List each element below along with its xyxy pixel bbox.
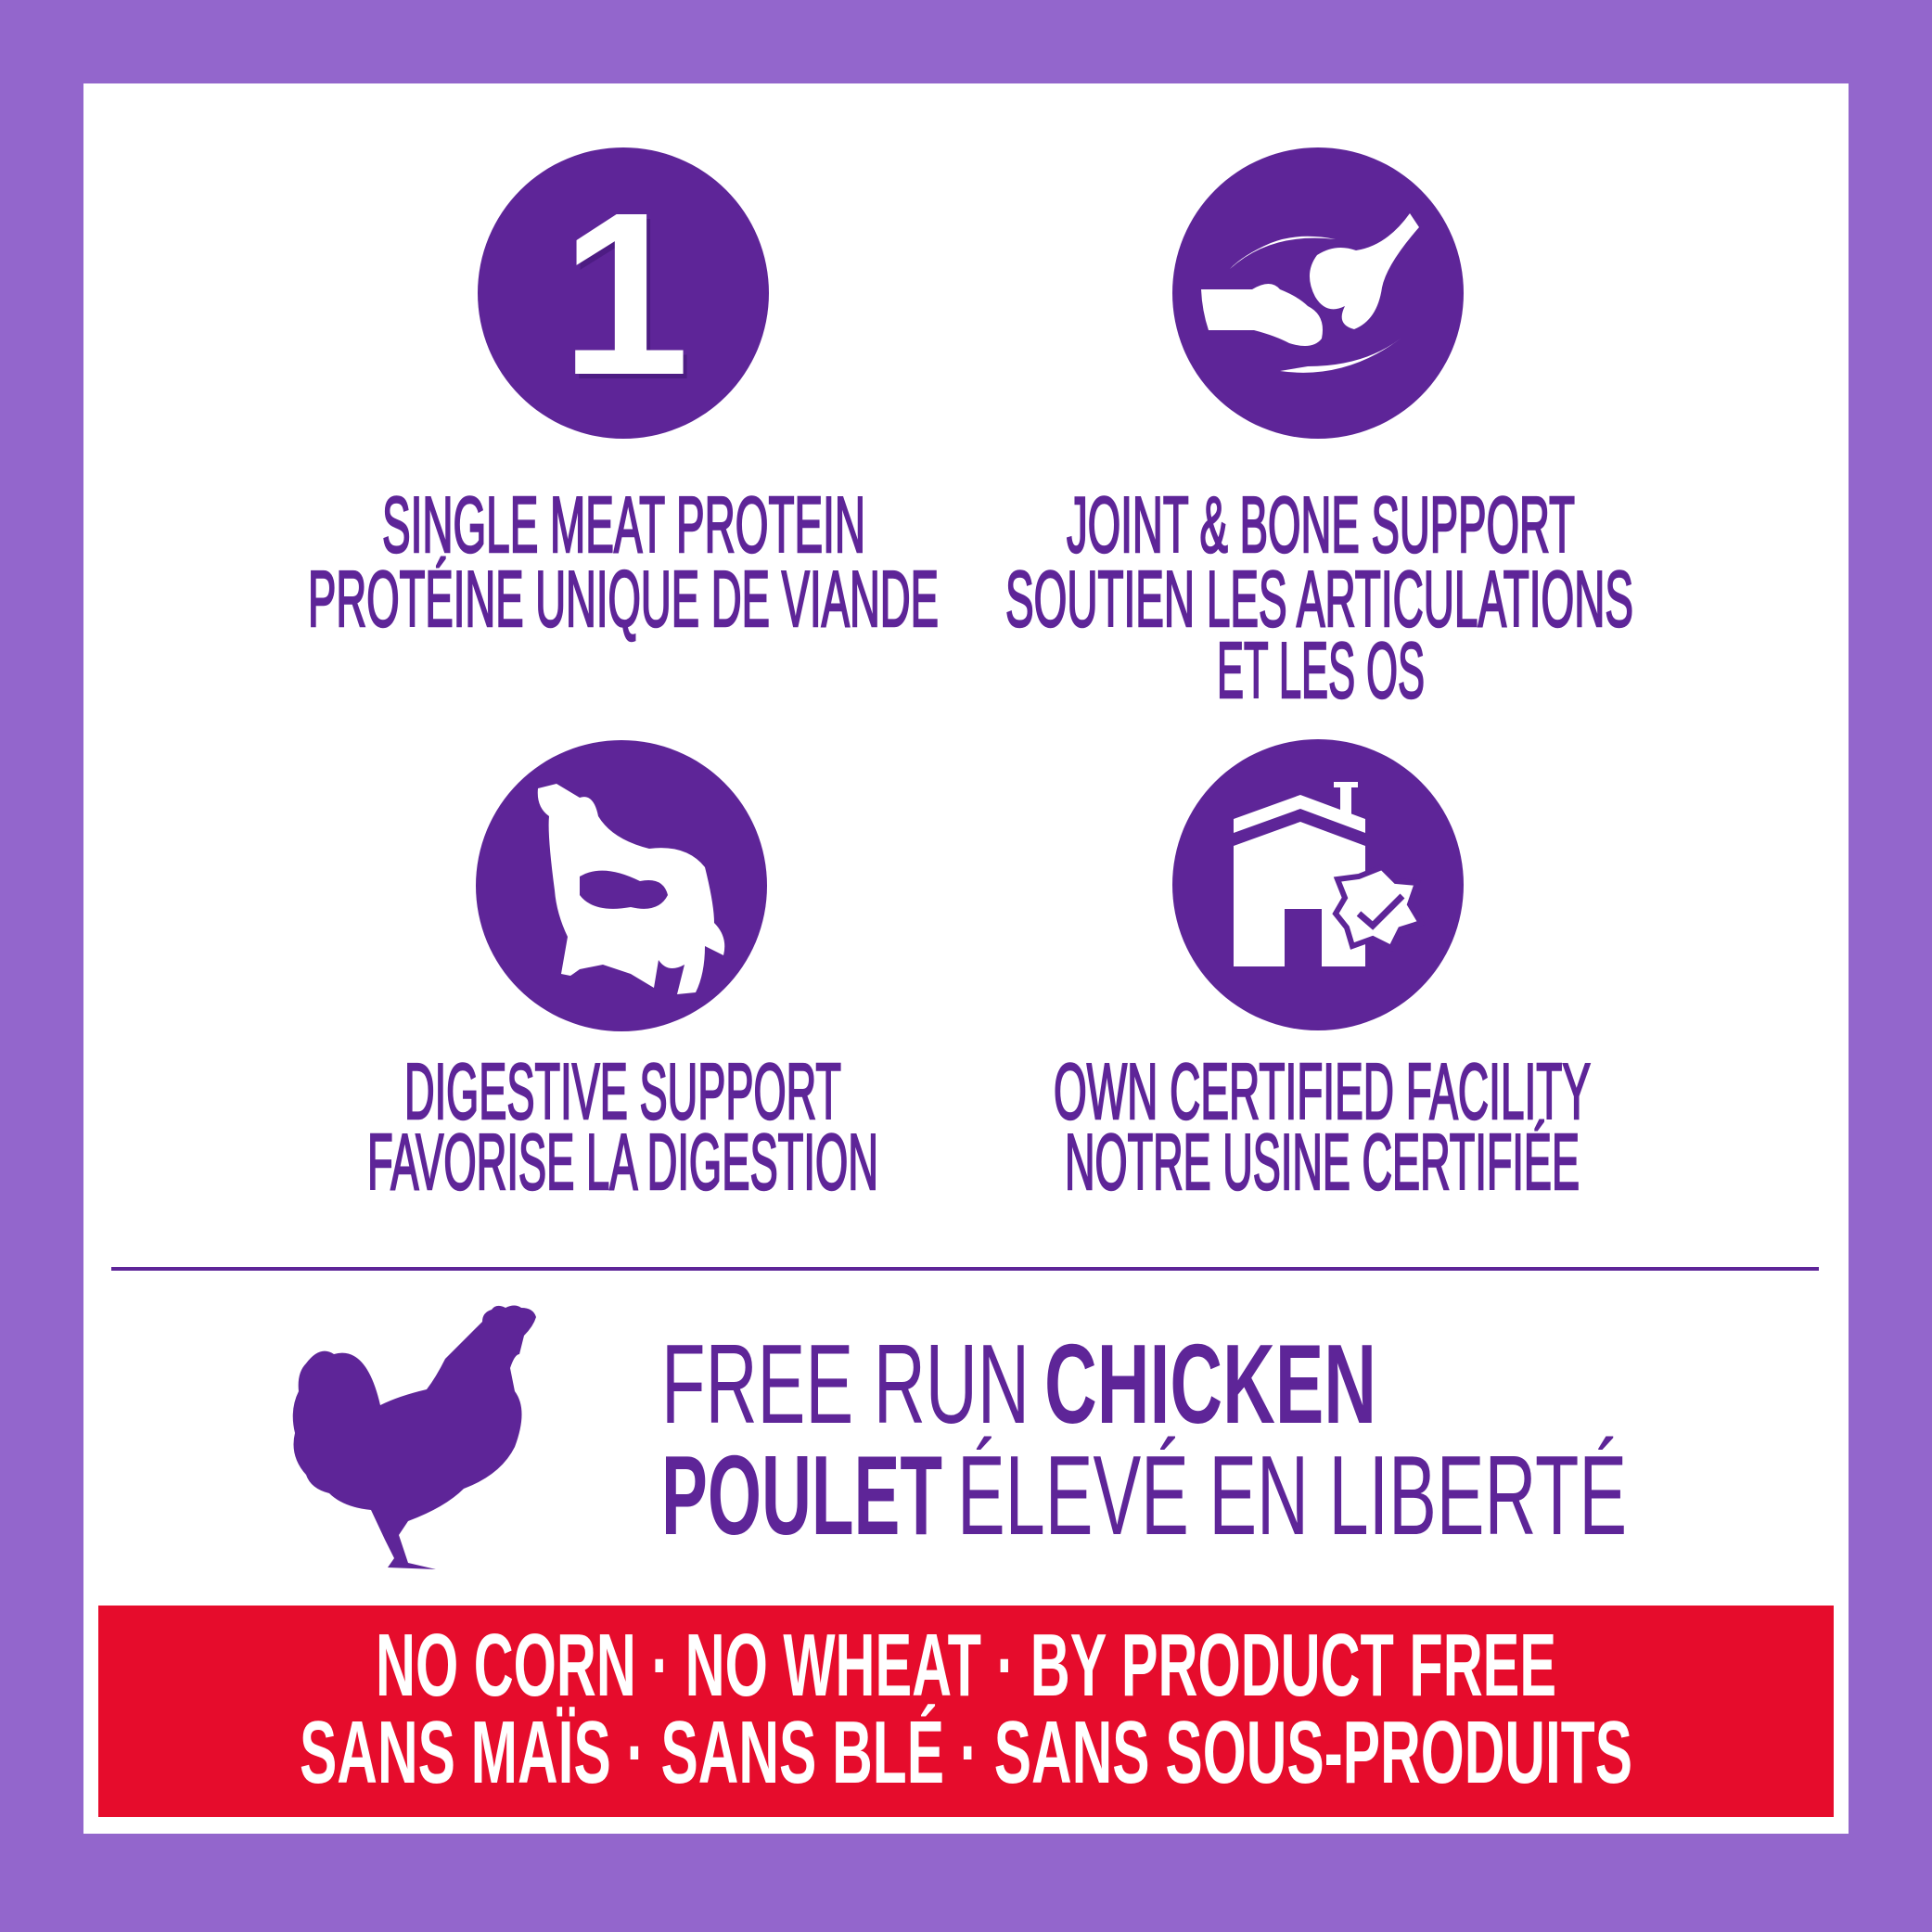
text: joint & bone support: ET LES OS [1217, 627, 1425, 715]
text: single meat protein [308, 481, 939, 644]
text: own certified facility [1054, 1048, 1591, 1207]
icon: dog with stomach [476, 740, 767, 1031]
icon: house with badge [1172, 739, 1464, 1030]
icon: chicken [293, 1306, 536, 1569]
icon: number 1 circle [478, 147, 769, 439]
heading: free run chicken: POULET [661, 1432, 942, 1558]
heading: free run chicken [661, 1321, 1627, 1558]
feature: digestive support [367, 740, 878, 1207]
heading: free run chicken: FREE RUN [661, 1321, 1030, 1447]
feature: own certified facility [1054, 739, 1591, 1207]
heading: free run chicken: CHICKEN [1044, 1321, 1376, 1447]
banner: no corn no wheat [98, 1606, 1834, 1817]
text: joint & bone support [1005, 481, 1633, 715]
icon: number 1 circle: 1 [560, 164, 690, 423]
feature: joint & bone support [1005, 147, 1633, 715]
text: digestive support: DIGESTIVE SUPPORT [404, 1048, 841, 1136]
text: single meat protein: SINGLE MEAT PROTEIN [382, 481, 865, 569]
text: digestive support [367, 1048, 878, 1207]
text: single meat protein: PROTÉINE UNIQUE DE VIANDE [308, 556, 939, 644]
feature: single meat protein [308, 147, 939, 644]
text: digestive support: FAVORISE LA DIGESTION [367, 1119, 878, 1207]
icon: number 1 circle: 1 [564, 169, 694, 428]
icon: hand with bone [1172, 147, 1464, 439]
